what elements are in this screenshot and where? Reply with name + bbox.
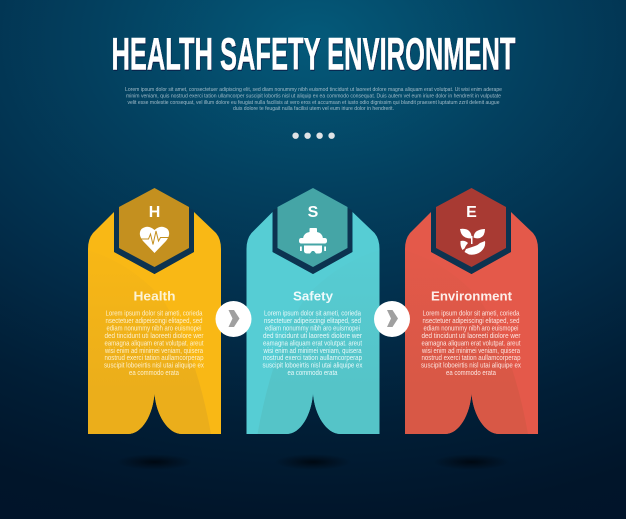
- body text: environment: wisi enim ad minimei veniam, quisera: [421, 348, 520, 355]
- body text: environment: nsectetuer adipeiscingi elitaped, sed: [422, 318, 520, 325]
- intro text: minim veniam, quis nostrud exerci tation ullamcorper suscipit lobortis nisl ut aliquip ex ea commodo consequat. Duis autem vel eum iriure dolor in hendrerit in vulputate: [126, 94, 501, 100]
- letter: E: E: [466, 204, 477, 221]
- hexagon frame: health: [114, 195, 194, 274]
- hexagon: environment: [436, 188, 506, 267]
- body text: health: ediam nonummy nibh aro euismopei: [106, 325, 202, 332]
- card body: health: [88, 212, 221, 434]
- body text: health: [104, 310, 204, 377]
- icon: plant in hand: [460, 229, 485, 255]
- body text: health: nostrud exerci tation aullamcorperap: [104, 355, 204, 362]
- panel: safety: [246, 188, 380, 434]
- body text: safety: ediam nonummy nibh aro euismopei: [265, 325, 360, 332]
- card body: safety: [246, 212, 380, 434]
- hexagon frame: environment: [432, 195, 510, 274]
- intro text: duis dolore te feugait nulla facilisi utem vel eum iriure dolor in hendrerit.: [233, 106, 394, 112]
- intro text: Lorem ipsum dolor sit amet, consectetuer adipiscing elit, sed diam nonummy nibh euismod tincidunt ut laoreet dolore magna aliquam erat volutpat. Ut wisi enim aderape: [125, 87, 502, 93]
- arrow: safety to environment: [374, 301, 410, 337]
- card shadows: [116, 454, 510, 470]
- body text: safety: wisi enim ad minimei veniam, quisera: [263, 348, 362, 355]
- panel: environment: [405, 188, 538, 434]
- body text: safety: nsectetuer adipeiscingi elitaped, sed: [264, 318, 361, 325]
- body text: environment: ediam nonummy nibh aro euismopei: [424, 325, 519, 332]
- body text: environment: ded tincidunt uti laoreeti diolore wer: [422, 333, 521, 340]
- body text: health: nsectetuer adipeiscingi elitaped, sed: [106, 318, 203, 325]
- body text: environment: eamagna aliquam erat volutpat. areut: [422, 340, 521, 347]
- body text: health: wisi enim ad minimei veniam, quisera: [104, 348, 203, 355]
- body text: safety: [262, 310, 363, 377]
- body text: health: suscipit loboeirtis nisl utai aliquipe ex: [104, 363, 204, 370]
- panel: health: [88, 188, 221, 434]
- icon: heart with pulse: [140, 227, 169, 253]
- hexagon: health: [119, 188, 189, 267]
- body text: environment: ea commodo erata: [446, 370, 496, 377]
- body text: environment: nostrud exerci tation aullamcorperap: [422, 355, 521, 362]
- card body: environment: [405, 212, 538, 434]
- body text: environment: [421, 310, 521, 377]
- body text: safety: ea commodo erata: [288, 370, 338, 377]
- intro text: [125, 87, 502, 112]
- hexagon frame: safety: [273, 195, 352, 274]
- body text: safety: ded tincidunt uti laoreeti diolore wer: [263, 333, 363, 340]
- body text: environment: Lorem ipsum dolor sit ameti, corieda: [422, 310, 520, 318]
- body text: health: ded tincidunt uti laoreeti diolore wer: [104, 333, 204, 340]
- body text: safety: nostrud exerci tation aullamcorperap: [263, 355, 362, 362]
- body text: health: eamagna aliquam erat volutpat. areut: [104, 340, 204, 347]
- body text: safety: eamagna aliquam erat volutpat. areut: [263, 340, 362, 347]
- icon: helmet and goggles: [299, 228, 327, 254]
- letter: S: S: [308, 204, 319, 221]
- hexagon: safety: [278, 188, 348, 267]
- body text: health: Lorem ipsum dolor sit ameti, corieda: [106, 310, 203, 318]
- body text: health: ea commodo erata: [129, 370, 179, 377]
- intro text: velit esse molestie consequat, vel illum dolore eu feugiat nulla facilisis at vero eros et accumsan et iusto odio dignissim qui blandit praesent luptatum zzril delenit augue: [128, 100, 500, 106]
- arrow: health to safety: [216, 301, 252, 337]
- card facet: health: [88, 250, 211, 434]
- heading: health: Health: [134, 288, 176, 304]
- card facet: safety: [258, 250, 380, 434]
- heading: environment: Environment: [431, 288, 513, 304]
- body text: safety: Lorem ipsum dolor sit ameti, corieda: [264, 310, 361, 318]
- heading: safety: Safety: [293, 288, 334, 304]
- letter: H: H: [149, 204, 160, 221]
- card facet: environment: [405, 250, 528, 434]
- pagination dots: [292, 132, 335, 139]
- body text: environment: suscipit loboeirtis nisl utai aliquipe ex: [421, 363, 521, 370]
- body text: safety: suscipit loboeirtis nisl utai aliquipe ex: [262, 363, 363, 370]
